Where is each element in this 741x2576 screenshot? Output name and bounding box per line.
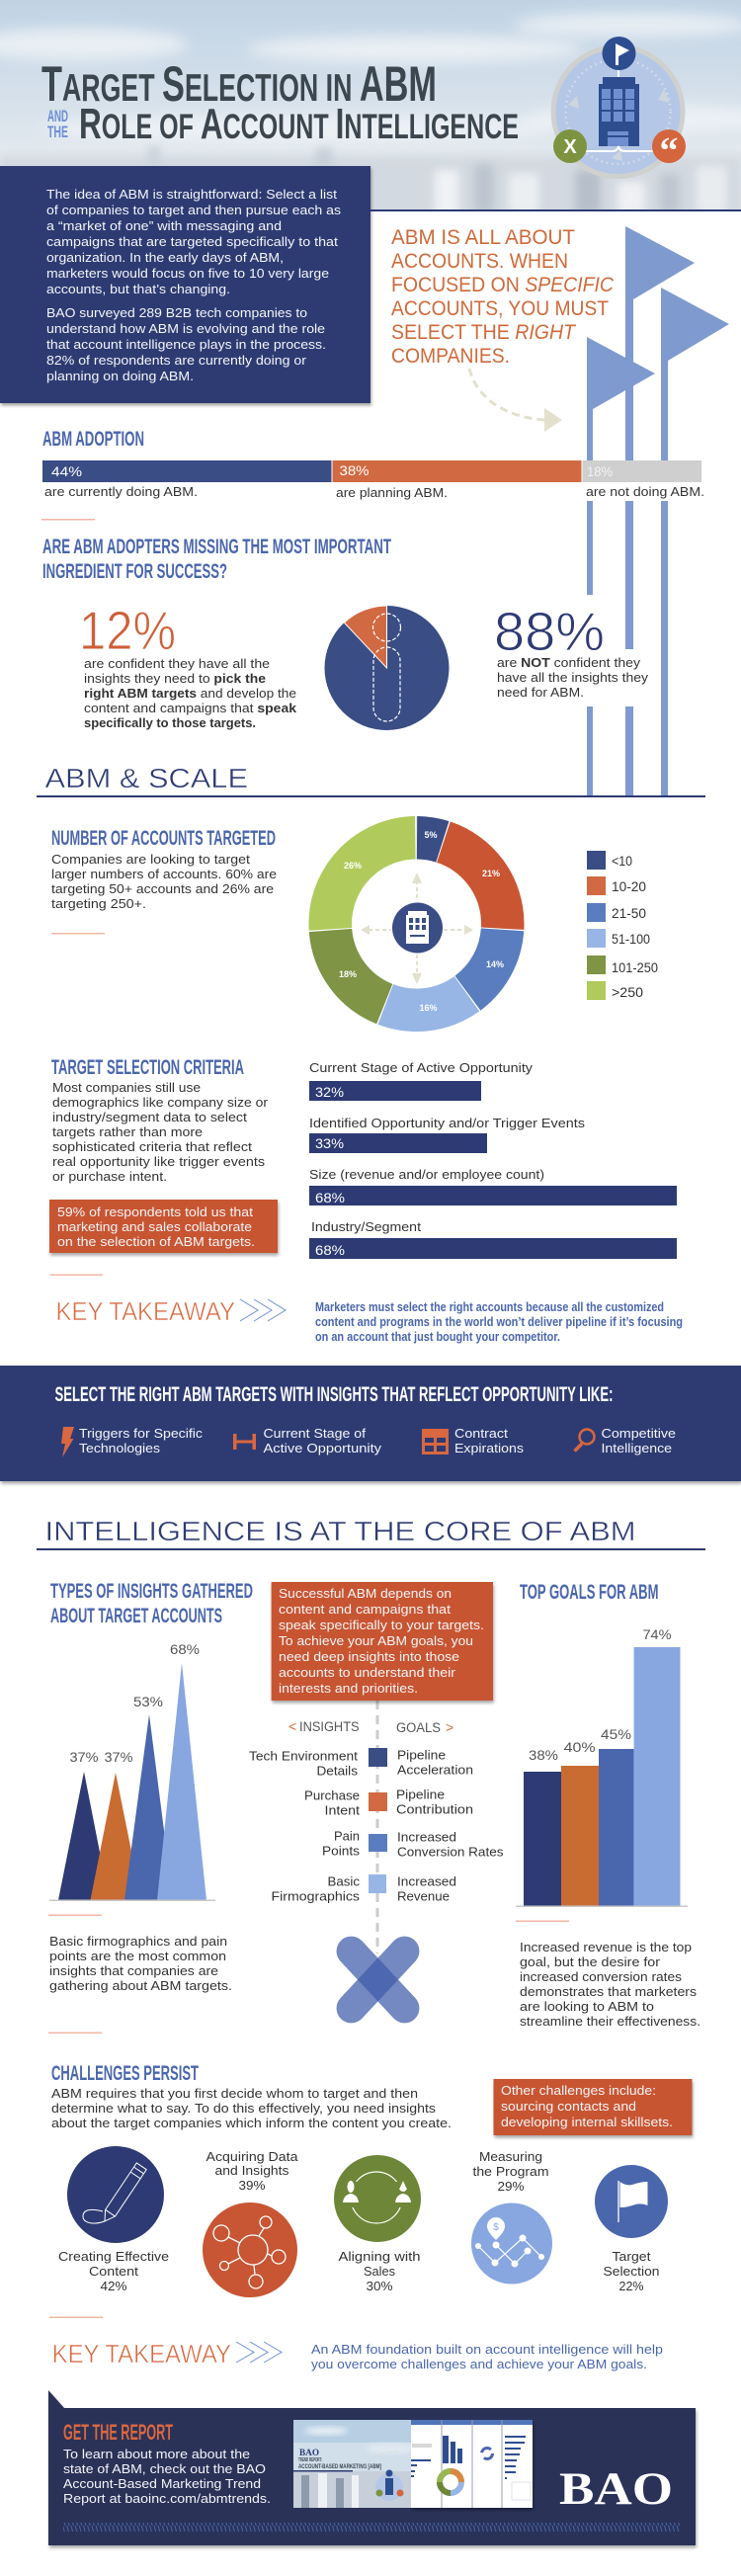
title: ROLE OF ACCOUNT INTELLIGENCE <box>79 100 519 148</box>
stat: 88% not confident: have all the insights they <box>497 671 649 685</box>
heading: missing ingredient: INGREDIENT FOR SUCCESS? <box>42 560 227 583</box>
panel: get the report: To learn about more about the <box>63 2448 250 2461</box>
challenge: acquiring data: Acquiring Data <box>206 2150 298 2164</box>
insights vs goals list: Basic <box>328 1875 360 1889</box>
stat: 12% confident <box>79 600 296 730</box>
key takeaway 1: Marketers must select the right accounts because all the customized <box>315 1300 664 1314</box>
banner: insights that reflect opportunity: Technologies <box>79 1442 160 1455</box>
banner: insights that reflect opportunity: Competitive <box>601 1427 676 1441</box>
insights vs goals list: Increased <box>397 1830 456 1844</box>
stat: 88% not confident <box>494 601 649 700</box>
callout: other challenges: Other challenges include: <box>501 2084 656 2098</box>
challenge: creating effective content: 42% <box>101 2280 126 2293</box>
challenge: creating effective content: Content <box>89 2265 139 2279</box>
text: number of accounts targeted: Companies are looking to target <box>51 853 251 867</box>
text: number of accounts targeted: larger numbers of accounts. 60% are <box>51 868 277 881</box>
section heading: ABM & scale: ABM & SCALE <box>45 763 248 793</box>
insights vs goals list: GOALS <box>396 1720 441 1735</box>
text: goals note: Increased revenue is the top <box>520 1941 692 1954</box>
title: TARGET SELECTION IN ABM <box>41 56 437 112</box>
bar chart: top goals: 40% <box>564 1739 596 1755</box>
insights vs goals list: Pipeline <box>396 1788 445 1802</box>
icon: span bracket <box>233 1434 256 1450</box>
panel: introduction: campaigns that are targeted specifically to that <box>46 235 339 249</box>
bar chart: selection criteria: Industry/Segment <box>311 1220 422 1234</box>
icon: crossed X <box>330 1930 426 2030</box>
banner: insights that reflect opportunity: Current Stage of <box>263 1427 367 1441</box>
insights vs goals list: INSIGHTS <box>299 1719 360 1734</box>
panel: get the report: GET THE REPORT <box>63 2420 173 2445</box>
challenge: measuring the program <box>471 2150 552 2285</box>
legend: account ranges: 101-250 <box>612 959 658 975</box>
insights vs goals list: Details <box>316 1765 358 1779</box>
insights vs goals list: Purchase <box>304 1788 360 1802</box>
challenge: aligning with sales <box>334 2155 421 2293</box>
insights vs goals list: Pain <box>334 1830 360 1844</box>
text: goals note: are looking to ABM to <box>520 2000 654 2014</box>
bar chart: selection criteria: 33% <box>315 1135 344 1151</box>
challenge: acquiring data: and Insights <box>215 2164 288 2178</box>
heading: missing ingredient: ARE ABM ADOPTERS MISSING THE MOST IMPORTANT <box>42 536 391 558</box>
donut chart: number of accounts: 5% <box>424 830 438 840</box>
key takeaway 1: KEY TAKEAWAY <box>55 1296 235 1326</box>
icon: magnifier <box>575 1429 595 1451</box>
callout: ABM is all about accounts: ABM IS ALL ABOUT <box>391 226 575 249</box>
text: target selection criteria: Most companies still use <box>52 1081 201 1095</box>
challenge: acquiring data: 39% <box>239 2179 265 2193</box>
text: target selection criteria: TARGET SELECTION CRITERIA <box>51 1056 244 1079</box>
text: number of accounts targeted: targeting 250+. <box>51 897 146 911</box>
insights vs goals list: Tech Environment <box>249 1749 359 1763</box>
banner: insights that reflect opportunity: Expirations <box>454 1442 524 1455</box>
insights vs goals list: Increased <box>397 1875 456 1889</box>
donut chart: number of accounts: 14% <box>486 959 504 969</box>
text: challenges persist: about the target companies which inform the content you create. <box>51 2117 452 2130</box>
white bands behind adoption bar and stats <box>583 460 706 706</box>
stacked bar: ABM adoption: are not doing ABM. <box>586 485 704 499</box>
challenge: aligning with sales: 30% <box>366 2280 393 2293</box>
heading: types of insights: ABOUT TARGET ACCOUNTS <box>50 1605 222 1627</box>
panel: introduction: understand how ABM is evolving and the role <box>46 322 325 336</box>
bar chart: selection criteria: Current Stage of Active Opportunity <box>309 1061 534 1075</box>
panel: get the report <box>48 2390 696 2545</box>
report thumbnails <box>293 2420 533 2508</box>
stat: 88% not confident: need for ABM. <box>497 686 584 700</box>
donut chart: number of accounts: 18% <box>339 969 357 979</box>
text: firmographics note <box>49 1935 232 1993</box>
legend: account ranges: 21-50 <box>612 905 646 921</box>
callout: ABM is all about accounts: SELECT THE RIGHT <box>391 321 577 344</box>
donut chart: number of accounts: 26% <box>344 861 362 871</box>
panel: introduction: 82% of respondents are currently doing or <box>46 354 306 368</box>
bar chart: selection criteria <box>309 1061 677 1259</box>
text: number of accounts targeted: targeting 50+ accounts and 26% are <box>51 882 274 896</box>
bar chart: top goals <box>516 1626 688 1907</box>
challenge: measuring the program: 29% <box>498 2180 524 2194</box>
legend: account ranges: 51-100 <box>612 931 650 947</box>
callout: other challenges <box>494 2079 692 2135</box>
stacked bar: ABM adoption: 18% <box>587 463 613 479</box>
donut chart: number of accounts: 16% <box>419 1003 438 1013</box>
panel: introduction: accounts, but that’s changing. <box>46 283 230 296</box>
challenge: measuring the program: $ <box>493 2222 499 2233</box>
stat: 12% confident: right ABM targets and develop the <box>84 687 296 701</box>
callout: ABM is all about accounts: COMPANIES. <box>391 345 510 368</box>
panel: introduction: that account intelligence plays in the process. <box>46 338 326 352</box>
callout: 59% collaborate: marketing and sales collaborate <box>57 1220 252 1234</box>
challenge: measuring the program: Measuring <box>479 2150 542 2164</box>
callout: successful ABM: Successful ABM depends on <box>279 1587 452 1601</box>
challenge: target selection <box>595 2165 668 2293</box>
panel: introduction: planning on doing ABM. <box>46 370 194 383</box>
callout: successful ABM: accounts to understand their <box>279 1666 455 1680</box>
challenge: aligning with sales: Sales <box>364 2265 395 2279</box>
icon: building with flag, X and quote badges <box>553 37 686 176</box>
callout: ABM is all about accounts: ACCOUNTS, YOU MUST <box>391 297 609 320</box>
panel: introduction: marketers would focus on five to 10 very large <box>46 267 329 281</box>
triangle chart: insight types: 53% <box>133 1694 163 1709</box>
stat: 88% not confident: are NOT confident they <box>497 656 641 670</box>
stacked bar: ABM adoption <box>42 460 704 500</box>
insights vs goals list: Pipeline <box>397 1749 446 1763</box>
insights vs goals list: Conversion Rates <box>397 1846 504 1860</box>
text: target selection criteria: targets rather than more <box>52 1125 203 1139</box>
callout: 59% collaborate: 59% of respondents told us that <box>57 1205 254 1219</box>
text: target selection criteria: real opportunity like trigger events <box>52 1155 265 1169</box>
callout: other challenges: developing internal skillsets. <box>501 2116 673 2129</box>
dashed centre line <box>375 1701 379 1953</box>
panel: introduction <box>0 166 370 403</box>
heading: types of insights: TYPES OF INSIGHTS GATHERED <box>50 1580 253 1603</box>
decorative flags background <box>587 226 729 795</box>
icon: calendar <box>422 1429 449 1454</box>
text: number of accounts targeted: NUMBER OF ACCOUNTS TARGETED <box>51 827 276 850</box>
text: challenges persist: CHALLENGES PERSIST <box>51 2062 199 2085</box>
challenge: target selection: Selection <box>603 2265 660 2279</box>
text: number of accounts targeted <box>51 827 277 911</box>
bar chart: selection criteria: 68% <box>315 1242 345 1258</box>
bar chart: selection criteria: 68% <box>315 1190 345 1205</box>
stat: 12% confident: 12% <box>79 600 176 661</box>
callout: ABM is all about accounts: FOCUSED ON SPECIFIC <box>391 274 615 296</box>
banner: insights that reflect opportunity: Triggers for Specific <box>79 1427 203 1441</box>
key takeaway 2 <box>52 2339 663 2371</box>
donut chart: number of accounts <box>330 830 504 1013</box>
callout: ABM is all about accounts: ACCOUNTS. WHEN <box>391 250 568 273</box>
triangle chart: insight types: 68% <box>170 1641 200 1657</box>
pie chart: 12 / 88 <box>324 606 449 730</box>
insights vs goals list <box>249 1718 504 1903</box>
legend: account ranges <box>587 851 658 1000</box>
panel: get the report: Report at baoinc.com/abmtrends. <box>63 2492 271 2506</box>
header sky and city photo <box>0 0 741 215</box>
text: goals note <box>520 1941 700 2029</box>
report cover: BAO <box>299 2448 319 2457</box>
icon: lightning <box>61 1427 74 1457</box>
challenge: creating effective content <box>58 2146 169 2293</box>
heading: top goals: TOP GOALS FOR ABM <box>520 1581 658 1604</box>
title: AND <box>47 107 68 125</box>
hatch strip <box>63 2523 680 2532</box>
legend: account ranges: >250 <box>612 984 643 1000</box>
donut chart: number of accounts: 21% <box>482 869 500 878</box>
callout: 59% collaborate: on the selection of ABM targets. <box>57 1235 255 1249</box>
insights vs goals list: Points <box>322 1844 360 1858</box>
challenge: creating effective content: Creating Effective <box>58 2250 169 2264</box>
stat: 12% confident: content and campaigns that speak <box>84 702 296 715</box>
insights vs goals list: Firmographics <box>271 1889 360 1903</box>
insights vs goals list: Contribution <box>396 1802 473 1816</box>
insights vs goals list: < <box>288 1718 296 1734</box>
text: target selection criteria: demographics like company size or <box>52 1096 268 1110</box>
panel: introduction: a “market of one” with messaging and <box>46 219 282 233</box>
icon: building with flag, X and quote badges: X <box>563 136 577 158</box>
challenge: acquiring data <box>203 2150 298 2297</box>
text: target selection criteria: or purchase intent. <box>52 1170 167 1184</box>
title: THE <box>47 123 68 141</box>
challenge: aligning with sales: Aligning with <box>338 2250 421 2264</box>
stat: 12% confident: are confident they have all the <box>84 657 270 671</box>
panel: introduction: organization. In the early days of ABM, <box>46 251 284 265</box>
callout: successful ABM <box>272 1582 493 1701</box>
callout: other challenges: sourcing contacts and <box>501 2100 636 2114</box>
insights vs goals list: Revenue <box>397 1889 450 1903</box>
report cover: ACCOUNT-BASED MARKETING [ABM] <box>298 2463 381 2470</box>
insights vs goals list: Intent <box>324 1804 361 1818</box>
triangle chart: insight types: 37% <box>105 1749 132 1765</box>
callout: successful ABM: content and campaigns that <box>279 1603 452 1617</box>
arrow: dashed curve toward flags <box>469 369 562 432</box>
panel: introduction: of companies to target and then pursue each as <box>46 204 341 217</box>
challenge: measuring the program: the Program <box>472 2165 549 2179</box>
text: target selection criteria: industry/segment data to select <box>52 1111 248 1124</box>
bar chart: top goals: 38% <box>529 1747 558 1763</box>
banner: insights that reflect opportunity: Contract <box>454 1427 509 1441</box>
stat: 88% not confident: 88% <box>494 601 605 662</box>
key takeaway 2: you overcome challenges and achieve your ABM goals. <box>311 2358 647 2371</box>
text: challenges persist <box>51 2062 452 2130</box>
text: target selection criteria <box>51 1056 268 1184</box>
title <box>41 56 519 148</box>
banner: insights that reflect opportunity <box>0 1366 741 1481</box>
panel: get the report: Account-Based Marketing Trend <box>63 2477 261 2491</box>
panel: get the report: state of ABM, check out the BAO <box>63 2462 266 2476</box>
bar chart: top goals: 74% <box>642 1626 672 1642</box>
legend: account ranges: <10 <box>612 853 632 869</box>
BAO logo: BAO <box>559 2463 673 2515</box>
text: goals note: streamline their effectiveness. <box>520 2015 700 2029</box>
text: target selection criteria: sophisticated criteria that reflect <box>52 1140 253 1154</box>
bar chart: selection criteria: Size (revenue and/or employee count) <box>309 1168 544 1182</box>
key takeaway 2: KEY TAKEAWAY <box>52 2339 231 2368</box>
callout: ABM is all about accounts <box>391 226 615 368</box>
text: firmographics note: insights that companies are <box>49 1964 218 1978</box>
key takeaway 2: An ABM foundation built on account intelligence will help <box>311 2343 663 2357</box>
key takeaway 1: content and programs in the world won’t deliver pipeline if it’s focusing <box>315 1315 683 1329</box>
heading: types of insights <box>50 1580 253 1627</box>
legend: account ranges: 10-20 <box>612 878 646 894</box>
panel: introduction: BAO surveyed 289 B2B tech companies to <box>46 306 307 320</box>
insights vs goals list: Acceleration <box>397 1763 473 1777</box>
callout: successful ABM: speak specifically to your targets. <box>279 1619 484 1632</box>
callout: successful ABM: interests and priorities. <box>279 1682 418 1696</box>
triangle chart: insight types: 37% <box>69 1749 99 1765</box>
stacked bar: ABM adoption: are currently doing ABM. <box>44 485 198 499</box>
text: goals note: increased conversion rates <box>520 1970 682 1984</box>
text: firmographics note: gathering about ABM targets. <box>49 1979 232 1993</box>
text: goals note: demonstrates that marketers <box>520 1985 697 1999</box>
callout: successful ABM: To achieve your ABM goals, you <box>279 1634 473 1648</box>
section heading: intelligence: INTELLIGENCE IS AT THE CORE OF ABM <box>45 1516 636 1546</box>
challenge: target selection: Target <box>613 2250 651 2264</box>
banner: insights that reflect opportunity: Active Opportunity <box>263 1442 382 1455</box>
text: challenges persist: ABM requires that you first decide whom to target and then <box>51 2087 418 2101</box>
text: goals note: goal, but the desire for <box>520 1955 660 1969</box>
report cover: TREND REPORT: <box>298 2457 322 2463</box>
bar chart: selection criteria: Identified Opportunity and/or Trigger Events <box>309 1117 585 1130</box>
icon: building with flag, X and quote badges: “ <box>660 130 678 172</box>
text: firmographics note: points are the most common <box>49 1950 226 1963</box>
stacked bar: ABM adoption: are planning ABM. <box>336 486 448 500</box>
bar chart: top goals: 45% <box>601 1726 631 1742</box>
insights vs goals list: > <box>446 1719 453 1735</box>
panel: introduction: The idea of ABM is straightforward: Select a list <box>46 188 338 202</box>
stat: 12% confident: specifically to those targets. <box>84 716 256 730</box>
heading: missing ingredient <box>42 536 391 583</box>
header rule <box>370 209 741 211</box>
callout: 59% collaborate <box>49 1200 278 1253</box>
text: firmographics note: Basic firmographics and pain <box>49 1935 227 1949</box>
banner: insights that reflect opportunity: Intelligence <box>601 1442 672 1455</box>
report cover <box>293 2420 414 2508</box>
stacked bar: ABM adoption: 38% <box>340 462 370 478</box>
challenge: target selection: 22% <box>618 2280 644 2293</box>
text: challenges persist: determine what to say. To do this effectively, you need insights <box>51 2102 436 2116</box>
heading: ABM adoption: ABM ADOPTION <box>42 428 144 451</box>
stat: 12% confident: insights they need to pick the <box>84 672 266 686</box>
key takeaway 1 <box>55 1296 683 1344</box>
triangle chart: insight types <box>49 1641 215 1901</box>
callout: successful ABM: need deep insights into those <box>279 1650 459 1664</box>
bar chart: selection criteria: 32% <box>315 1084 344 1100</box>
stacked bar: ABM adoption: 44% <box>51 463 82 479</box>
key takeaway 1: on an account that just bought your competitor. <box>315 1330 560 1344</box>
